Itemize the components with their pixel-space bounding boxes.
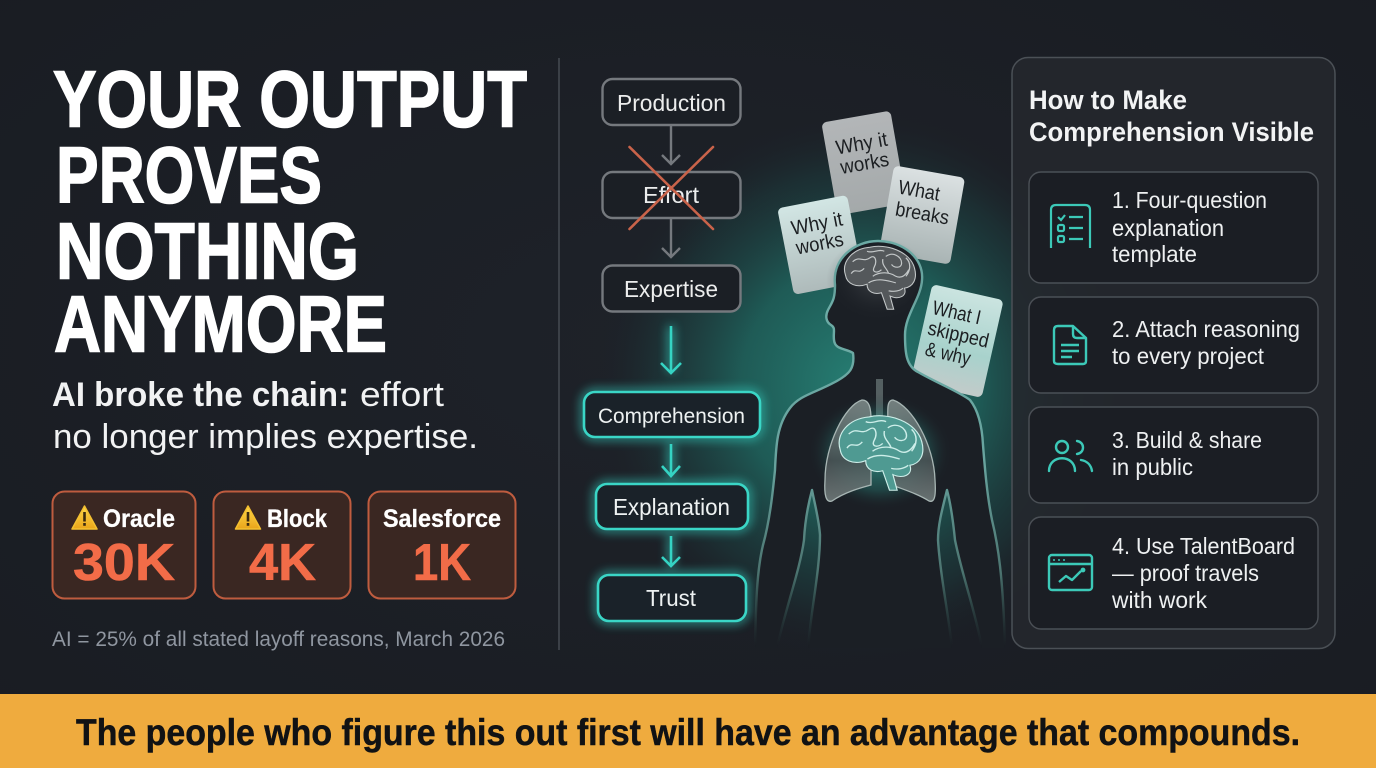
card: What I skipped & why [910,284,1004,398]
bottom banner [0,694,1376,768]
item 1: template [1112,241,1197,267]
arrow [662,125,680,164]
panel: how to make comprehension visible [1012,58,1335,648]
box: Explanation: Explanation [613,494,730,520]
card: What I skipped & why: skipped [926,318,991,353]
box: Comprehension: Comprehension [598,404,745,428]
subtitle: no longer implies expertise. [53,418,478,456]
stat card: Oracle [52,492,196,598]
card: What I skipped & why: & why [923,339,973,370]
panel heading [1029,85,1314,147]
glow layer [584,326,760,621]
item 2 [1029,297,1318,393]
head brain glow [826,238,930,322]
arrow [661,326,681,373]
item 3 [1029,407,1318,503]
right lung [888,400,935,501]
card: Why it works (back) [821,111,907,215]
left lung [825,400,871,501]
item 1: 1. Four-question [1112,187,1267,213]
flow: broken chain [602,79,740,312]
icon: people [1049,441,1092,471]
human silhouette [755,238,1005,648]
item 4: with work [1111,587,1207,613]
card: Why it works (back): works [838,149,891,179]
box: Trust [598,575,746,621]
stat card: Salesforce: Salesforce [383,505,501,533]
item 3: in public [1112,454,1193,480]
item 4 [1029,517,1318,629]
item 1: explanation [1112,215,1224,241]
item 4: — proof travels [1112,560,1259,586]
stat card: Salesforce [368,492,516,598]
brain in chest [839,416,923,490]
subtitle: effort [360,376,444,414]
item 3: 3. Build & share [1112,427,1262,453]
box: Effort [602,172,740,218]
item 2: 2. Attach reasoning [1112,316,1300,342]
card: Why it works (back): Why it [834,129,890,159]
icon: warning triangle [236,506,260,529]
stat card: Block [214,492,350,598]
panel heading: Comprehension Visible [1029,117,1314,147]
icon: browser chart [1049,555,1092,590]
card: Why it works (front) [777,195,864,295]
box: Expertise: Expertise [624,276,718,302]
icon: checklist [1051,205,1090,248]
footnote: AI = 25% of all stated layoff reasons, March 2026 [52,628,505,651]
stat card: Salesforce: 1K [413,534,471,592]
card: Why it works (front): Why it [789,208,845,240]
card: What breaks: breaks [894,198,951,230]
card: What I skipped & why: What I [930,297,983,329]
box: Production [602,79,740,125]
body outline [755,241,1005,648]
arrow [662,536,680,566]
icon: warning triangle [72,506,97,529]
item 4: 4. Use TalentBoard [1112,533,1295,559]
bottom banner: The people who figure this out first will have an advantage that compounds. [76,712,1300,753]
title: NOTHING [56,206,359,296]
box: Effort: Effort [643,182,700,208]
subtitle: AI broke the chain: [52,376,349,414]
card: What breaks: What [897,177,942,206]
box: Production: Production [617,90,726,116]
box: Trust: Trust [646,585,697,611]
brain in head [845,246,915,309]
box: Explanation [596,484,748,529]
stat card: Oracle: Oracle [103,505,175,533]
teal glow behind figure [595,110,1125,660]
stat card: Oracle: 30K [73,534,175,592]
stat card: Block: 4K [249,534,316,592]
subtitle [52,376,478,456]
arrow [662,218,680,257]
red cross-out [630,147,713,229]
title: YOUR OUTPUT [53,54,527,144]
item 2: to every project [1112,343,1265,369]
box: Comprehension [584,392,760,437]
panel heading: How to Make [1029,85,1187,115]
box: Expertise [602,266,740,312]
card: Why it works (front): works [793,229,845,260]
vertical divider [558,58,560,650]
title: ANYMORE [54,280,387,368]
card: What breaks [879,165,965,265]
title: PROVES [56,130,322,220]
arrow [662,444,680,476]
windpipe [876,379,883,419]
title [53,54,527,368]
chest glow [808,394,952,510]
stat card: Block: Block [267,505,327,533]
body fill [755,241,1005,648]
icon: document [1054,326,1086,364]
item 1 [1029,172,1318,283]
flow: new chain [584,326,760,621]
